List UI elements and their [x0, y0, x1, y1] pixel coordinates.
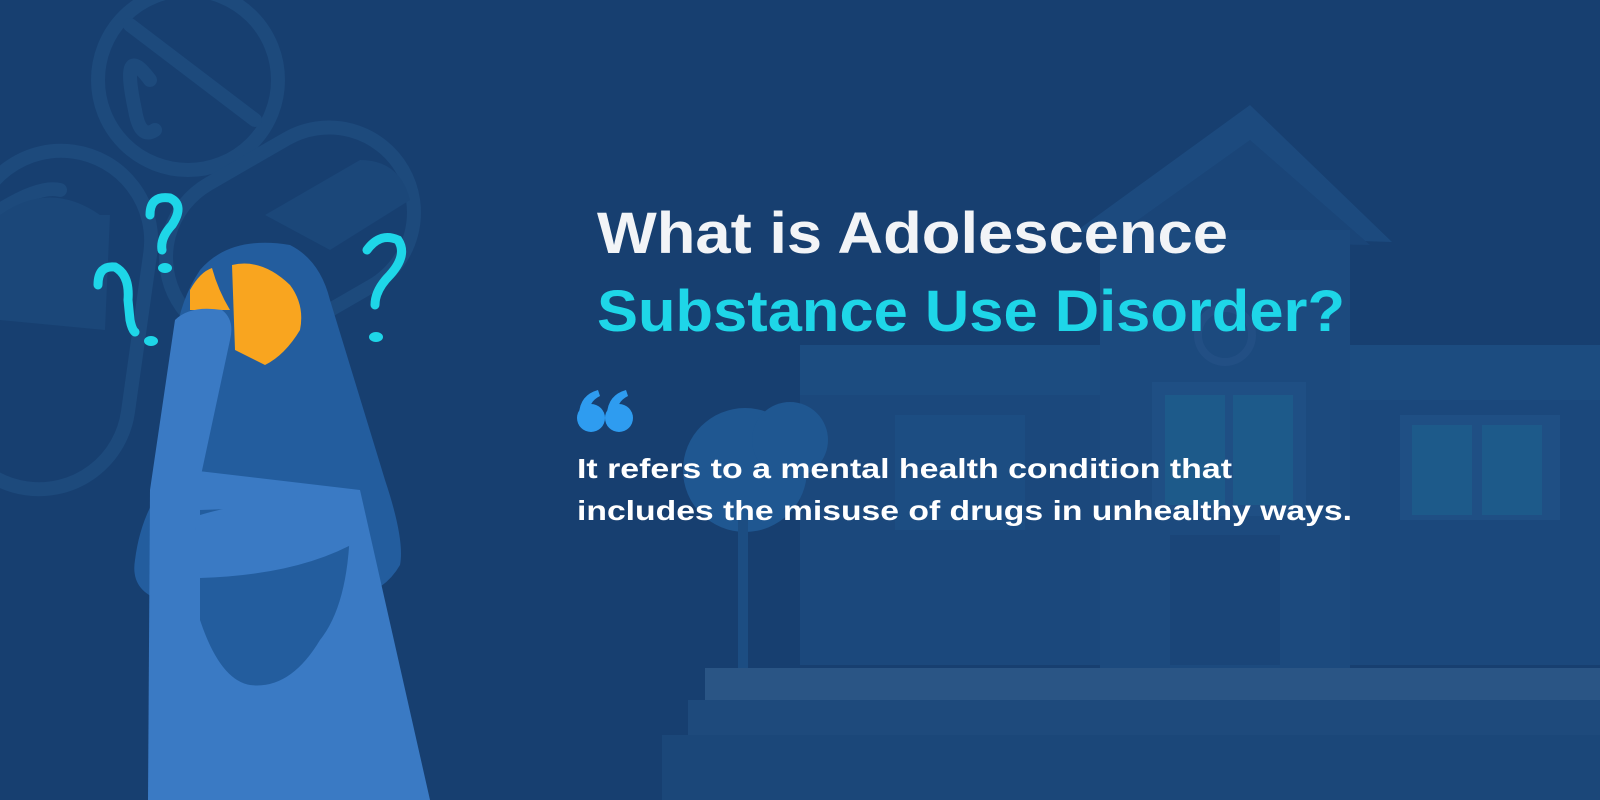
- background: house: [662, 105, 1600, 800]
- icon: quote mark: [577, 390, 633, 432]
- title: Substance Use Disorder?: [597, 279, 1345, 344]
- title: What is Adolescence: [597, 201, 1228, 266]
- figure: thinking person: [134, 243, 430, 800]
- background: tree: [683, 402, 828, 668]
- description text: [577, 453, 1352, 526]
- description text: It refers to a mental health condition that: [577, 453, 1232, 484]
- title: [597, 201, 1345, 344]
- icons: question marks: [98, 198, 402, 332]
- background: pills: [0, 0, 445, 501]
- description text: includes the misuse of drugs in unhealthy ways.: [577, 495, 1352, 526]
